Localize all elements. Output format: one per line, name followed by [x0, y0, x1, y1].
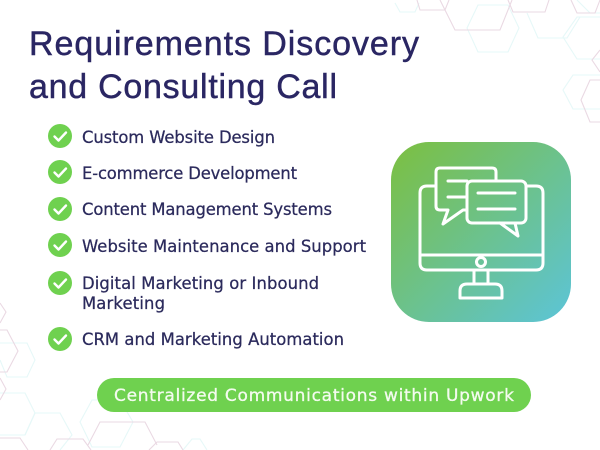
item: e-commerce development	[48, 160, 298, 184]
item: digital marketing or inbound marketing: Marketing	[82, 294, 165, 313]
callout: centralized communications: Centralized Communications within Upwork	[114, 386, 514, 406]
checklist	[48, 124, 367, 351]
icon: monitor with chat bubbles	[391, 142, 571, 322]
item: content management systems	[48, 197, 332, 221]
item: e-commerce development: E-commerce Development	[82, 164, 298, 183]
item: website maintenance and support: Website Maintenance and Support	[82, 237, 367, 256]
item: digital marketing or inbound marketing	[48, 271, 319, 313]
title	[29, 25, 419, 106]
item: content management systems: Content Management Systems	[82, 200, 332, 219]
item: digital marketing or inbound marketing: Digital Marketing or Inbound	[82, 274, 319, 293]
callout: centralized communications	[97, 378, 531, 412]
item: custom website design: Custom Website Design	[82, 128, 275, 147]
item: custom website design	[48, 124, 275, 148]
item: crm and marketing automation: CRM and Marketing Automation	[82, 330, 344, 349]
title: and Consulting Call	[29, 68, 337, 106]
title: Requirements Discovery	[29, 25, 419, 63]
